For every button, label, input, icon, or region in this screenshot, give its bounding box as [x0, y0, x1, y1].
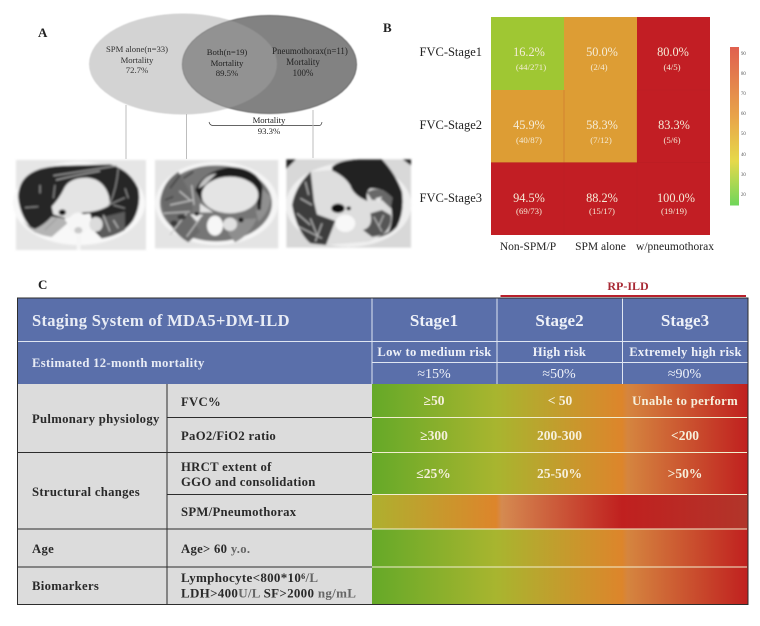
connector lines	[126, 105, 313, 159]
heatmap values: 58.3%	[586, 118, 618, 132]
criteria thresholds: Unable to perform	[632, 394, 738, 408]
criteria thresholds: 25-50%	[537, 466, 582, 481]
criteria thresholds: ≥300	[420, 428, 448, 443]
heatmap values: (2/4)	[590, 62, 608, 72]
heatmap values: (69/73)	[516, 206, 542, 216]
color scale legend: 80	[741, 72, 746, 77]
heatmap values: (4/5)	[663, 62, 681, 72]
CT scan: SPM alone	[13, 160, 146, 250]
heatmap values: 94.5%	[513, 191, 545, 205]
category labels	[32, 412, 160, 593]
color scale legend: 90	[741, 52, 746, 57]
criteria labels: /L	[304, 570, 318, 585]
venn label: SPM alone: SPM alone(n=33)	[106, 44, 168, 54]
stage headings: Stage1	[410, 311, 458, 330]
mortality percentages	[417, 367, 702, 382]
venn: pneumothorax circle	[182, 14, 358, 115]
color scale legend	[730, 47, 746, 206]
criteria thresholds: <200	[671, 428, 699, 443]
criteria thresholds: ≤25%	[416, 466, 451, 481]
venn: SPM alone circle	[89, 14, 277, 114]
criteria labels: 6	[301, 572, 305, 581]
mortality percentages: ≈90%	[668, 367, 702, 382]
venn label: pneumothorax: 100%	[293, 68, 314, 78]
criteria thresholds	[416, 393, 738, 481]
risk levels: Low to medium risk	[377, 345, 492, 359]
column labels: w/pneumothorax	[636, 241, 714, 253]
heatmap values: (5/6)	[663, 135, 681, 145]
column labels	[500, 241, 714, 253]
stage headings	[410, 311, 709, 330]
criteria thresholds: 200-300	[537, 428, 582, 443]
panel: B mortality heatmap	[383, 17, 746, 253]
criteria labels: Lymphocyte<800*10	[181, 570, 301, 585]
color scale legend: 40	[741, 153, 746, 158]
panel: A Venn diagram and CT scans	[13, 14, 411, 250]
criteria labels: PaO2/FiO2 ratio	[181, 429, 276, 443]
heatmap values: 88.2%	[586, 191, 618, 205]
color scale legend: 50	[741, 132, 746, 137]
criteria labels: GGO and consolidation	[181, 475, 316, 489]
heatmap values: 45.9%	[513, 118, 545, 132]
criteria labels	[181, 395, 356, 600]
risk levels: High risk	[533, 345, 586, 359]
stage headings: Stage2	[535, 311, 584, 330]
label C: C	[38, 277, 47, 292]
mortality label: Estimated 12-month mortality	[32, 356, 205, 370]
heatmap values: 80.0%	[657, 45, 689, 59]
category labels: Structural changes	[32, 485, 140, 499]
heatmap values: (40/87)	[516, 135, 542, 145]
heatmap values: 50.0%	[586, 45, 618, 59]
criteria labels: LDH>400U/L SF>2000 ng/mL	[181, 586, 356, 600]
category labels: Pulmonary physiology	[32, 412, 160, 426]
header title: Staging System of MDA5+DM-ILD	[32, 311, 290, 330]
column labels: Non-SPM/P	[500, 241, 556, 253]
criteria labels: HRCT extent of	[181, 460, 272, 474]
category labels: Biomarkers	[32, 579, 99, 593]
label B: B	[383, 20, 392, 35]
mortality percentages: ≈15%	[417, 367, 451, 382]
row labels: FVC-Stage1	[420, 45, 482, 59]
row labels	[420, 45, 482, 205]
category labels: Age	[32, 542, 54, 556]
color scale legend: 70	[741, 92, 746, 97]
venn label: pneumothorax: Pneumothorax(n=11)	[272, 46, 348, 56]
panel: C staging table	[18, 277, 748, 604]
heatmap values: 83.3%	[658, 118, 690, 132]
gradient risk rows	[372, 384, 748, 604]
heatmap values	[513, 45, 695, 216]
RP-ILD bracket: RP-ILD	[607, 279, 649, 293]
table left columns	[18, 384, 372, 604]
heatmap values: (44/271)	[516, 62, 546, 72]
criteria labels: FVC%	[181, 395, 221, 409]
venn label: SPM alone: Mortality	[121, 55, 154, 65]
criteria thresholds: ≥50	[424, 393, 445, 408]
row labels: FVC-Stage3	[420, 191, 482, 205]
table outline	[18, 298, 748, 604]
bracket: combined mortality	[209, 115, 322, 136]
venn label: pneumothorax: Mortality	[286, 57, 320, 67]
venn label: both: Mortality	[211, 58, 244, 68]
heatmap values: 16.2%	[513, 45, 545, 59]
heatmap values: 100.0%	[657, 191, 695, 205]
color scale legend: 30	[741, 173, 746, 178]
heatmap values: (19/19)	[661, 206, 687, 216]
color scale legend: 20	[741, 193, 746, 198]
bracket: combined mortality: 93.3%	[258, 126, 280, 136]
risk levels: Extremely high risk	[629, 345, 742, 359]
heatmap grid	[491, 17, 710, 235]
criteria labels: SPM/Pneumothorax	[181, 505, 297, 519]
CT scan: pneumothorax	[286, 159, 411, 248]
venn label: both: 89.5%	[216, 68, 238, 78]
venn label: both: Both(n=19)	[207, 47, 247, 57]
bracket: combined mortality: Mortality	[253, 115, 286, 125]
column labels: SPM alone	[575, 241, 626, 253]
table header	[18, 298, 748, 384]
CT scan: both	[155, 160, 278, 248]
venn label: SPM alone: 72.7%	[126, 65, 148, 75]
criteria labels: Age> 60 y.o.	[181, 542, 250, 556]
criteria thresholds: < 50	[548, 393, 573, 408]
risk levels	[377, 345, 742, 359]
label A: A	[38, 25, 48, 40]
row labels: FVC-Stage2	[420, 118, 482, 132]
mortality percentages: ≈50%	[542, 367, 576, 382]
color scale legend: 60	[741, 112, 746, 117]
heatmap values: (7/12)	[590, 135, 612, 145]
heatmap values: (15/17)	[589, 206, 615, 216]
stage headings: Stage3	[661, 311, 709, 330]
criteria thresholds: >50%	[668, 466, 702, 481]
